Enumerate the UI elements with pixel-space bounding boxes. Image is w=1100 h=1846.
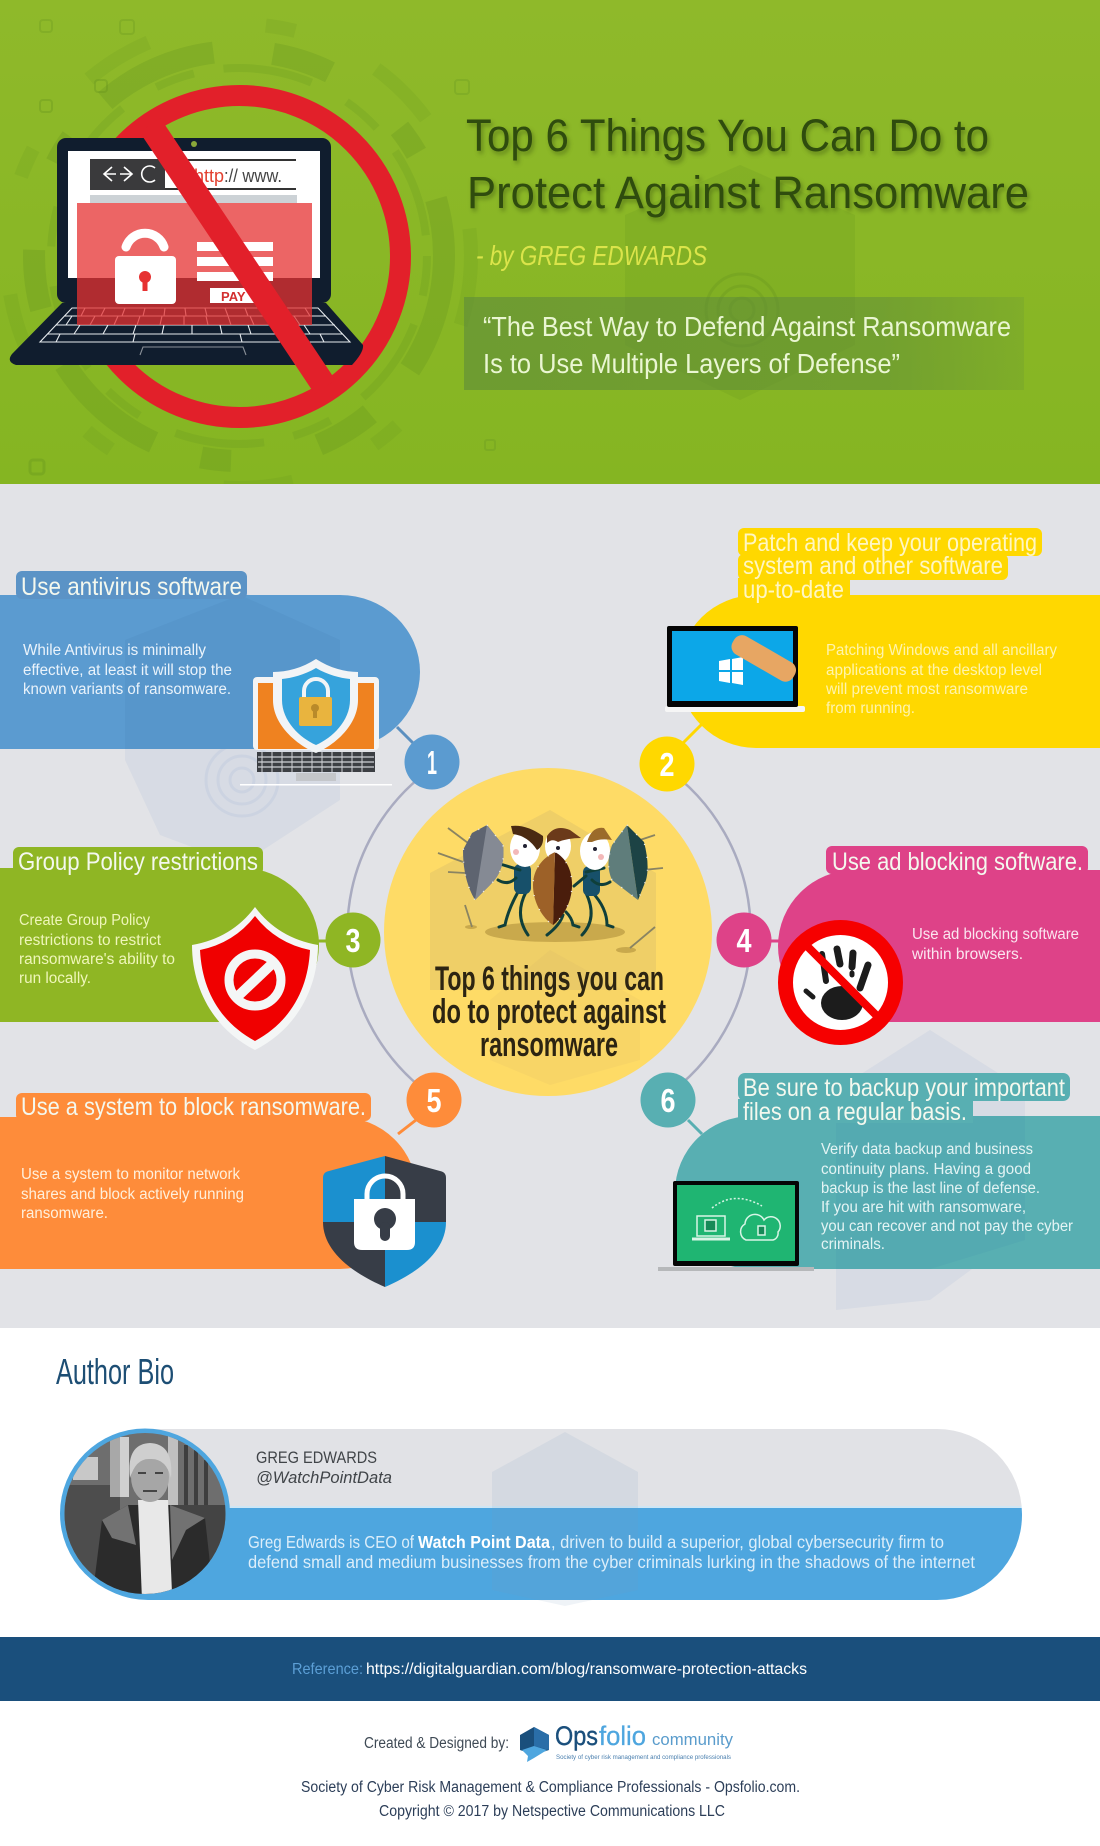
logo: Opsfolio community: Society of cyber risk management and compliance professionals (556, 1754, 732, 1761)
icon: prohibition slash (150, 125, 325, 387)
connector: step 4 (770, 940, 782, 942)
panel: step 2 patching (665, 528, 1100, 748)
text: step 5: shares and block actively running (21, 1186, 244, 1203)
text: step 6 (821, 1141, 1073, 1253)
heading: center (432, 960, 666, 1064)
number badge 6: 6 (660, 1082, 676, 1119)
footer text: Copyright © 2017 by Netspective Communications LLC (379, 1803, 725, 1820)
number badge 2 (640, 736, 694, 792)
text: step 3: run locally. (19, 970, 91, 987)
text: step 6: backup is the last line of defense. (821, 1180, 1040, 1197)
heading: step 2: Patch and keep your operating (743, 529, 1037, 557)
text: step 6: Verify data backup and business (821, 1141, 1033, 1158)
heading: author bio: Author Bio (56, 1351, 174, 1392)
panel: step 1 antivirus (0, 571, 420, 786)
text: step 5 (21, 1166, 244, 1222)
number badge 1 (404, 734, 460, 790)
heading: step 6: files on a regular basis. (743, 1098, 967, 1126)
author description: defend small and medium businesses from the cyber criminals lurking in the shadows of the internet (248, 1552, 975, 1572)
text: step 2: from running. (826, 700, 915, 717)
number badge 4: 4 (736, 922, 752, 959)
panel: author bio card (60, 1425, 1022, 1606)
icon: blue and dark shield (323, 1156, 446, 1287)
text: step 3: ransomware's ability to (19, 951, 175, 968)
icon: laptop with ransomware lock: http (194, 166, 224, 186)
logo: Opsfolio community (520, 1721, 733, 1762)
heading: step 1: Use antivirus software (21, 573, 242, 601)
panel: step 3 group policy (0, 847, 330, 1050)
icon: patched windows laptop (665, 626, 805, 712)
number badge 1: 1 (427, 744, 437, 781)
text: step 2: applications at the desktop level (826, 662, 1042, 679)
number badge 6 (640, 1072, 696, 1128)
text: step 2 (825, 642, 1057, 717)
heading: center: ransomware (480, 1026, 618, 1064)
panel: step 5 block ransomware (0, 1093, 446, 1287)
text: step 1: effective, at least it will stop the (23, 662, 232, 679)
icon: laptop with ransomware lock: :// www. (224, 166, 282, 186)
text: step 4: Use ad blocking software (912, 926, 1079, 943)
number badge 3 (326, 912, 380, 968)
title: Protect Against Ransomware (467, 167, 1029, 218)
photo: author portrait (60, 1425, 235, 1600)
author name: @WatchPointData (256, 1468, 392, 1487)
text: step 6: continuity plans. Having a good (821, 1161, 1031, 1178)
icon: laptop with ransomware lock: PAY (221, 289, 246, 304)
icon: red shield (192, 907, 318, 1050)
byline: - by GREG EDWARDS (476, 240, 707, 271)
reference band: Reference: (292, 1661, 363, 1678)
panel: step 6 backup (658, 1073, 1100, 1271)
connector: step 2 (680, 722, 704, 746)
icon: prohibition circle behind laptop (78, 96, 400, 418)
connector: step 3 (318, 940, 330, 942)
logo: Opsfolio community: Ops (555, 1721, 598, 1751)
text: step 1 (23, 642, 232, 698)
number badge 5 (406, 1072, 462, 1128)
heading: step 6 (738, 1073, 1070, 1126)
heading: step 2: system and other software (743, 552, 1003, 580)
connector: step 6 (688, 1120, 702, 1134)
footer text (301, 1779, 800, 1820)
connector: step 5 (398, 1120, 416, 1134)
text: step 3: Create Group Policy (19, 912, 150, 929)
heading: center: Top 6 things you can (435, 960, 664, 998)
icon: laptop with shield (240, 659, 392, 786)
author description: , driven to build a superior, global cybersecurity firm to (551, 1532, 944, 1552)
text: step 5: ransomware. (21, 1205, 108, 1222)
number badge 3: 3 (346, 922, 360, 959)
text: step 6: you can recover and not pay the cyber (821, 1218, 1073, 1235)
heading: step 2: up-to-date (743, 576, 844, 604)
logo: Opsfolio community: folio (599, 1721, 646, 1751)
text: step 6: criminals. (821, 1236, 885, 1253)
connector: step 1 (397, 727, 418, 748)
steps section background (0, 484, 1100, 1328)
heading: step 2 (738, 528, 1042, 604)
author name (256, 1448, 392, 1487)
text: step 4: within browsers. (911, 946, 1023, 963)
footer text: Society of Cyber Risk Management & Compliance Professionals - Opsfolio.com. (301, 1779, 800, 1796)
icon: laptop with ransomware lock (10, 138, 363, 365)
panel: step 4 ad blocking (770, 846, 1100, 1038)
illustration: team holding shields (438, 825, 663, 953)
heading: center: do to protect against (432, 993, 666, 1031)
reference band: https://digitalguardian.com/blog/ransomware-protection-attacks (366, 1661, 807, 1678)
text: step 5: Use a system to monitor network (21, 1166, 240, 1183)
quote box: “The Best Way to Defend Against Ransomware (483, 311, 1011, 342)
logo: Opsfolio community: community (652, 1730, 733, 1749)
icon: no hand sign (786, 928, 896, 1038)
heading: step 3: Group Policy restrictions (18, 848, 258, 876)
author description: Watch Point Data (418, 1532, 550, 1552)
central circle (384, 768, 712, 1096)
reference band (0, 1637, 1100, 1701)
title: Top 6 Things You Can Do to (466, 110, 989, 161)
header panel (0, 0, 1100, 488)
credit text: Created & Designed by: (364, 1735, 509, 1752)
connector ring: right arc (663, 766, 751, 1098)
icon: backup laptop (658, 1181, 814, 1271)
text: step 1: While Antivirus is minimally (23, 642, 206, 659)
text: step 3: restrictions to restrict (19, 932, 162, 949)
text: step 6: If you are hit with ransomware, (821, 1199, 1026, 1216)
author description: Greg Edwards is CEO of (248, 1532, 414, 1552)
author name: GREG EDWARDS (256, 1448, 377, 1467)
quote box: Is to Use Multiple Layers of Defense” (483, 348, 900, 379)
text: step 1: known variants of ransomware. (23, 681, 231, 698)
number badge 2: 2 (660, 746, 674, 783)
text: step 4 (911, 926, 1079, 963)
quote box (464, 297, 1024, 390)
title (466, 110, 1029, 218)
author description (248, 1532, 975, 1572)
connector ring: left arc (347, 766, 435, 1098)
number badge 4 (716, 912, 772, 968)
heading: step 5: Use a system to block ransomware. (21, 1093, 366, 1121)
text: step 2: Patching Windows and all ancillary (826, 642, 1057, 659)
text: step 3 (19, 912, 175, 987)
text: step 2: will prevent most ransomware (825, 681, 1028, 698)
number badge 5: 5 (426, 1082, 442, 1119)
